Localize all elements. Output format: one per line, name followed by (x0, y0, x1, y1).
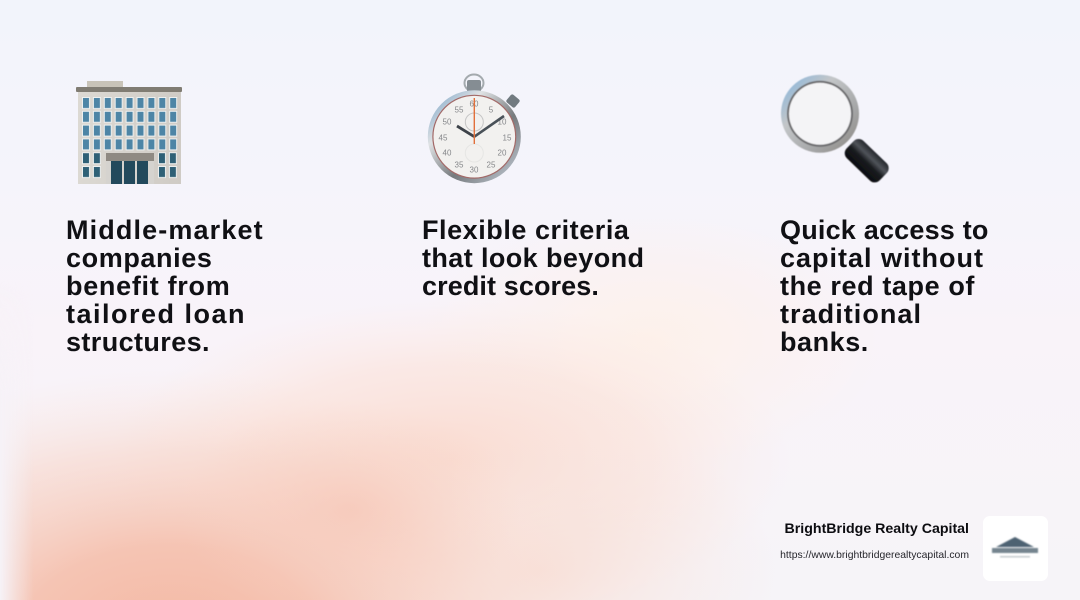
text: middle-market companies: companies (66, 243, 212, 273)
text: flexible criteria (422, 215, 644, 301)
text: quick access to capital: capital without (780, 243, 984, 273)
icon: stopwatch: 20 (498, 148, 507, 158)
text: middle-market companies: structures. (66, 327, 210, 357)
icon: office building (76, 81, 182, 184)
icon: stopwatch: 60 (470, 100, 479, 108)
icon: magnifying glass (780, 74, 890, 184)
icon: stopwatch: 40 (443, 148, 452, 158)
text: middle-market companies: Middle-market (66, 215, 264, 245)
icon: stopwatch: 30 (470, 166, 479, 174)
text: quick access to capital: Quick access to (780, 215, 989, 245)
icon: stopwatch: 50 (443, 118, 452, 126)
icon: stopwatch: 25 (487, 160, 496, 170)
website url: https://www.brightbridgerealtycapital.com (780, 550, 969, 561)
text: flexible criteria: that look beyond (422, 243, 644, 273)
icon: logo mark (991, 536, 1039, 558)
icon: stopwatch: 15 (503, 134, 512, 142)
text: middle-market companies: benefit from (66, 271, 230, 301)
brand name: BrightBridge Realty Capital (785, 521, 969, 537)
icon: stopwatch: 5 (489, 106, 494, 114)
icon: stopwatch: 35 (455, 160, 464, 170)
icon: stopwatch: 55 (455, 106, 464, 114)
text: flexible criteria: Flexible criteria (422, 215, 629, 245)
text: quick access to capital (780, 215, 989, 357)
icon: stopwatch (428, 74, 521, 184)
icon: stopwatch: 10 (498, 118, 507, 126)
icon: stopwatch: 45 (439, 134, 448, 142)
text: quick access to capital: the red tape of (780, 271, 975, 301)
text: quick access to capital: traditional (780, 299, 922, 329)
text: middle-market companies (66, 215, 264, 357)
text: flexible criteria: credit scores. (422, 271, 599, 301)
logo card (983, 516, 1048, 581)
text: quick access to capital: banks. (780, 327, 869, 357)
text: middle-market companies: tailored loan (66, 299, 246, 329)
